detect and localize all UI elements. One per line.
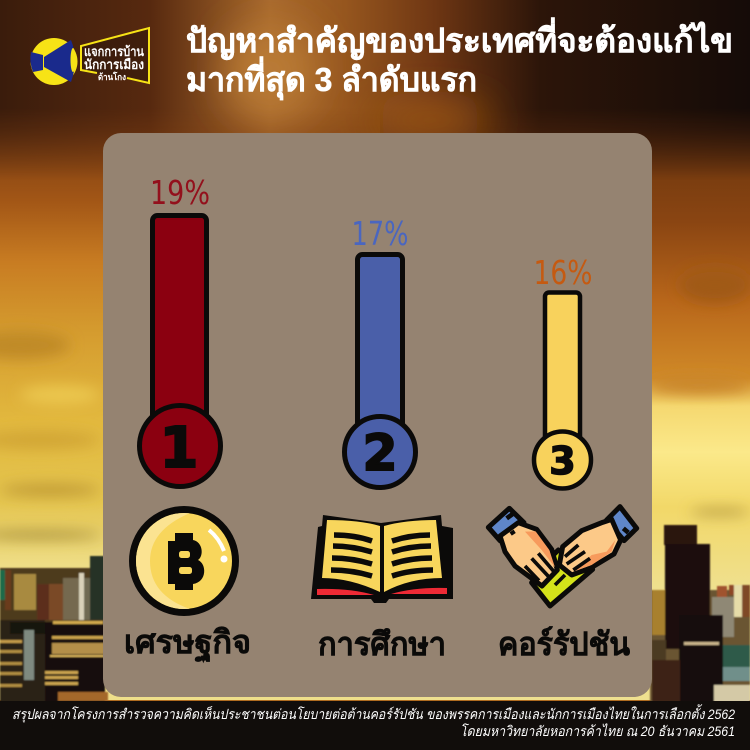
thermometer bar 3: 3: [549, 439, 576, 483]
value: 16%: 16%: [534, 253, 592, 292]
rank 2: education: [311, 214, 453, 662]
footer source text: [12, 704, 735, 739]
left hand: [500, 523, 557, 586]
thermometer bar 1: 1: [160, 416, 198, 481]
value: 17%: 17%: [352, 214, 408, 253]
icon: open book: [311, 515, 453, 603]
label: economy: เศรษฐกิจ: [124, 624, 251, 663]
left skyline: [0, 568, 105, 703]
label: education: การศึกษา: [318, 626, 446, 662]
logo: yellow frame and name: นักการเมือง: [84, 57, 144, 72]
logo: [30, 28, 149, 85]
thermometer bar 2: 2: [363, 424, 397, 482]
panel: ranking: [103, 133, 652, 697]
title: [186, 17, 733, 101]
rank 1: economy: [124, 173, 251, 663]
title: ปัญหาสำคัญของประเทศที่จะต้องแก้ไข: [186, 17, 733, 60]
right hand: [559, 519, 621, 575]
right cuff: [607, 507, 637, 541]
banknote: [532, 550, 593, 606]
logo: megaphone badge: [30, 38, 77, 85]
footer band: [0, 701, 750, 750]
logo: yellow frame and name: แจกการบ้าน: [84, 44, 144, 59]
value: 19%: 19%: [150, 173, 210, 212]
right skyline: [650, 590, 750, 705]
thermometer bar 2: [344, 254, 416, 488]
thermometer bar 1: [140, 216, 220, 486]
icon: hands exchanging money: [488, 507, 637, 606]
logo: yellow frame and name: [81, 28, 149, 83]
label: corruption: คอร์รัปชัน: [498, 626, 630, 662]
thermometer bar 3: [534, 292, 591, 488]
title: มากที่สุด 3 ลำดับแรก: [186, 56, 477, 101]
left cuff: [488, 508, 524, 541]
logo: yellow frame and name: ด้านโกง: [98, 71, 126, 82]
rank 3: corruption: [488, 253, 637, 662]
icon: baht coin: [132, 510, 236, 612]
